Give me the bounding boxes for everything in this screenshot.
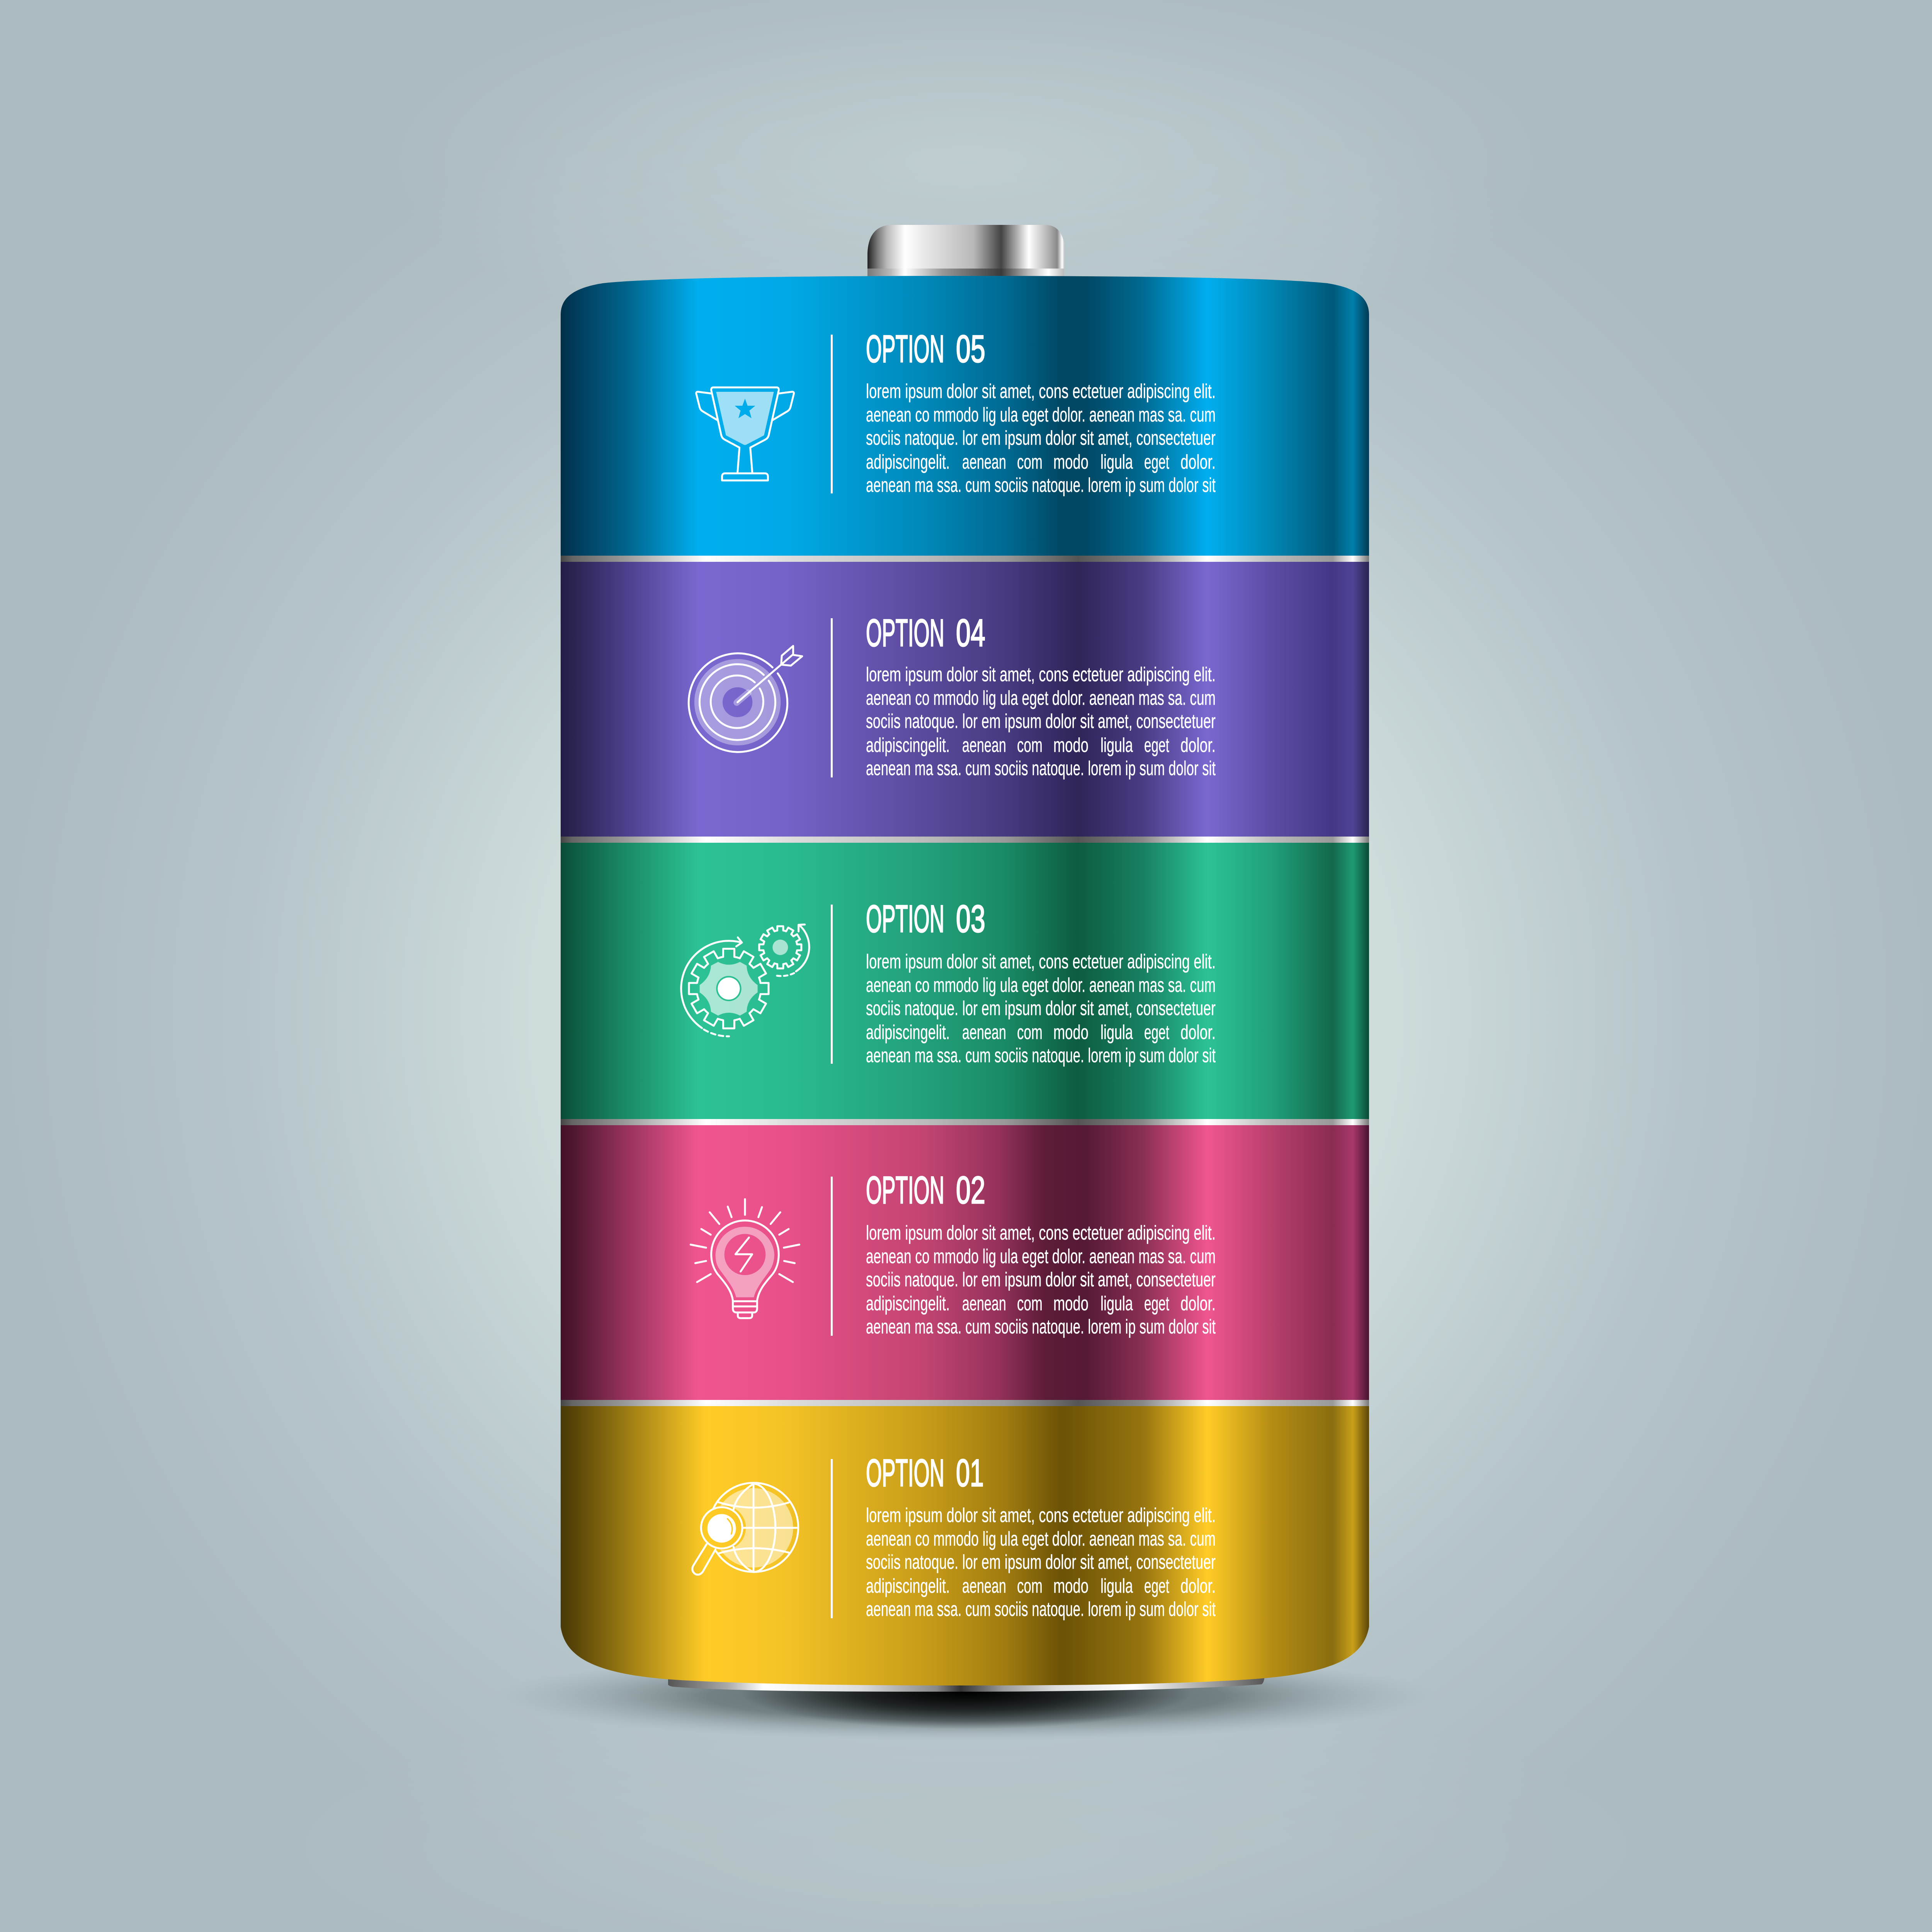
text block: eget <box>1144 451 1169 473</box>
panel: option 02 <box>690 1168 1216 1338</box>
text block: dolor. <box>1180 1021 1216 1044</box>
text block: lorem ipsum dolor sit amet, cons ectetuer adipiscing elit. <box>866 380 1216 403</box>
text block: aenean co mmodo lig ula eget dolor. aenean mas sa. cum <box>866 1245 1216 1268</box>
text block: sociis natoque. lor em ipsum dolor sit amet, consectetuer <box>866 710 1216 733</box>
icon: globe and magnifier <box>692 1483 798 1575</box>
text block: aenean ma ssa. cum sociis natoque. lorem ip sum dolor sit <box>866 1044 1216 1067</box>
text block: aenean co mmodo lig ula eget dolor. aenean mas sa. cum <box>866 404 1216 426</box>
text block: adipiscingelit. <box>866 1575 950 1597</box>
text block: dolor. <box>1180 734 1216 757</box>
text block <box>866 663 1216 780</box>
text block: ligula <box>1100 1575 1133 1597</box>
panel: option 01 <box>692 1451 1216 1621</box>
heading: OPTION <box>866 897 944 940</box>
text block: aenean <box>962 1575 1006 1597</box>
text block: eget <box>1144 1575 1169 1597</box>
heading: 01 <box>956 1451 984 1494</box>
text block: dolor. <box>1180 1575 1216 1597</box>
panel: option 05 <box>696 327 1216 497</box>
text block: aenean ma ssa. cum sociis natoque. lorem ip sum dolor sit <box>866 1316 1216 1338</box>
panel: option 04 <box>689 611 1216 780</box>
text block: aenean <box>962 1021 1006 1044</box>
icon: light bulb <box>690 1199 799 1318</box>
divider <box>831 618 833 777</box>
icon: gears <box>681 925 809 1036</box>
text block: sociis natoque. lor em ipsum dolor sit amet, consectetuer <box>866 1269 1216 1291</box>
heading: 02 <box>956 1168 985 1211</box>
text block: aenean co mmodo lig ula eget dolor. aenean mas sa. cum <box>866 1528 1216 1550</box>
text block: com <box>1017 1575 1043 1597</box>
text block: lorem ipsum dolor sit amet, cons ectetuer adipiscing elit. <box>866 951 1216 973</box>
text block: eget <box>1144 1293 1169 1315</box>
heading: 05 <box>956 327 985 370</box>
text block: modo <box>1053 1575 1088 1597</box>
text block: dolor. <box>1180 451 1216 473</box>
divider <box>831 335 833 493</box>
text block: aenean <box>962 451 1006 473</box>
text block <box>866 951 1216 1067</box>
text block: adipiscingelit. <box>866 451 950 473</box>
divider <box>831 1459 833 1618</box>
heading: OPTION <box>866 1168 944 1211</box>
battery body bands <box>561 270 1369 1692</box>
battery terminal cap <box>867 225 1064 276</box>
text block: modo <box>1053 1293 1088 1315</box>
text block: modo <box>1053 1021 1088 1044</box>
text block: ligula <box>1100 1293 1133 1315</box>
text block: adipiscingelit. <box>866 734 950 757</box>
text block: aenean <box>962 1293 1006 1315</box>
text block: adipiscingelit. <box>866 1021 950 1044</box>
text block: com <box>1017 451 1043 473</box>
heading: OPTION <box>866 1451 944 1494</box>
heading: OPTION <box>866 327 944 370</box>
text block: eget <box>1144 734 1169 757</box>
text block: aenean ma ssa. cum sociis natoque. lorem ip sum dolor sit <box>866 474 1216 497</box>
text block: com <box>1017 734 1043 757</box>
text block: aenean co mmodo lig ula eget dolor. aenean mas sa. cum <box>866 687 1216 709</box>
heading: 04 <box>956 611 985 654</box>
text block: ligula <box>1100 734 1133 757</box>
text block: eget <box>1144 1021 1169 1044</box>
battery base rim <box>668 1673 1265 1692</box>
text block: aenean ma ssa. cum sociis natoque. lorem ip sum dolor sit <box>866 757 1216 780</box>
text block: modo <box>1053 734 1088 757</box>
icon: trophy <box>696 388 794 480</box>
text block: com <box>1017 1021 1043 1044</box>
text block: sociis natoque. lor em ipsum dolor sit amet, consectetuer <box>866 427 1216 449</box>
text block: lorem ipsum dolor sit amet, cons ectetuer adipiscing elit. <box>866 1504 1216 1527</box>
icon: target and arrow <box>689 646 802 752</box>
text block: modo <box>1053 451 1088 473</box>
heading: 03 <box>956 897 985 940</box>
text block: ligula <box>1100 1021 1133 1044</box>
battery infographic <box>242 55 1690 1874</box>
text block <box>866 1222 1216 1338</box>
text block: aenean co mmodo lig ula eget dolor. aenean mas sa. cum <box>866 974 1216 997</box>
text block: sociis natoque. lor em ipsum dolor sit amet, consectetuer <box>866 1551 1216 1573</box>
text block: com <box>1017 1293 1043 1315</box>
text block: aenean <box>962 734 1006 757</box>
text block: aenean ma ssa. cum sociis natoque. lorem ip sum dolor sit <box>866 1598 1216 1621</box>
divider <box>831 905 833 1064</box>
panel: option 03 <box>681 897 1216 1067</box>
text block <box>866 380 1216 497</box>
text block: lorem ipsum dolor sit amet, cons ectetuer adipiscing elit. <box>866 663 1216 686</box>
ground shadow <box>495 1652 1437 1741</box>
text block: adipiscingelit. <box>866 1293 950 1315</box>
text block: dolor. <box>1180 1293 1216 1315</box>
text block <box>866 1504 1216 1621</box>
divider <box>831 1177 833 1336</box>
text block: lorem ipsum dolor sit amet, cons ectetuer adipiscing elit. <box>866 1222 1216 1244</box>
heading: OPTION <box>866 611 944 654</box>
text block: sociis natoque. lor em ipsum dolor sit amet, consectetuer <box>866 997 1216 1020</box>
text block: ligula <box>1100 451 1133 473</box>
